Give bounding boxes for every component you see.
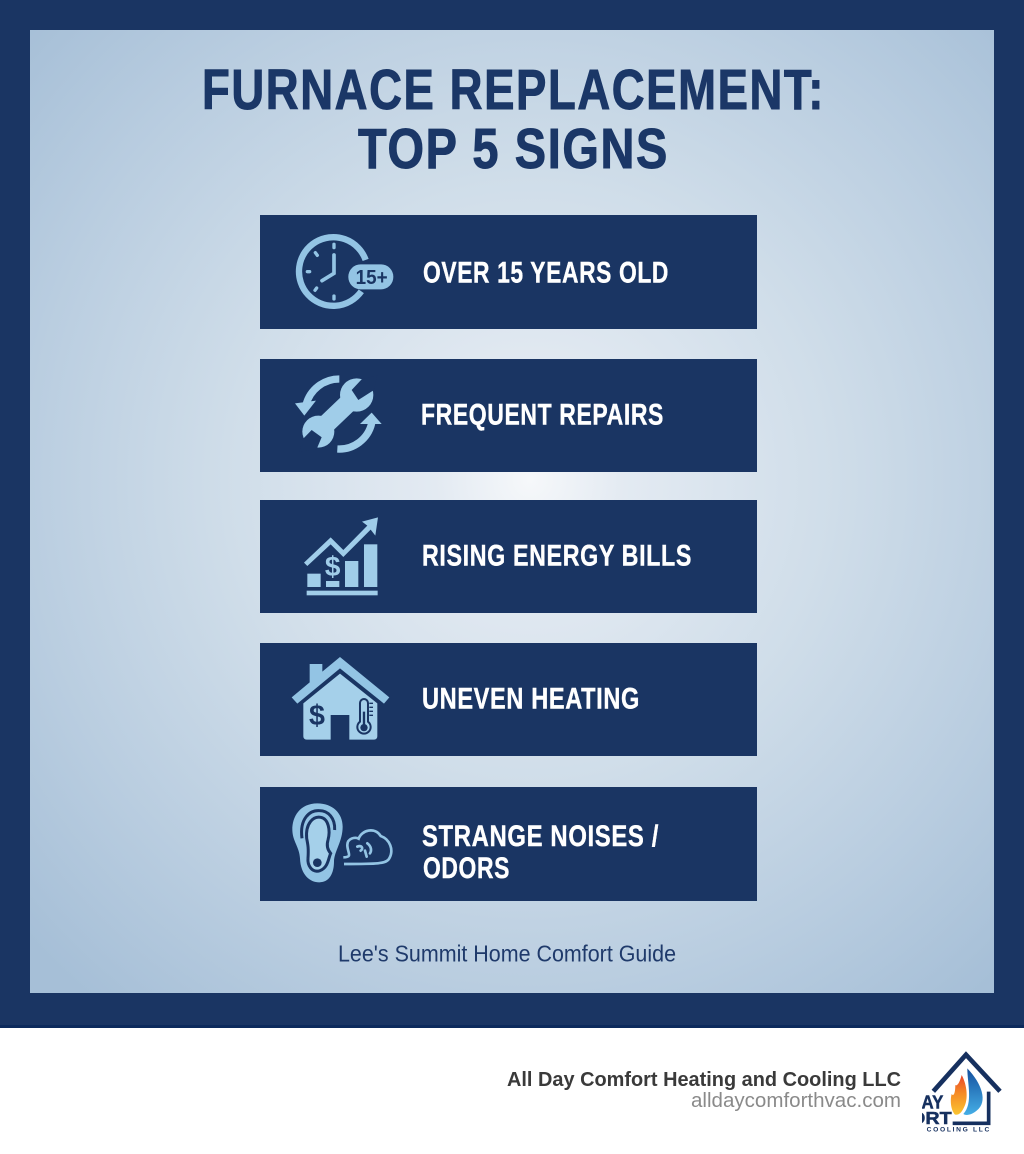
panel: frequent repairs (260, 359, 757, 472)
icon: clock with 15+ badge (299, 237, 393, 306)
panel: strange noises / odors (260, 787, 757, 901)
label: over 15 years old: OVER 15 YEARS OLD (423, 256, 669, 290)
logo: COOLING LLC (927, 1127, 990, 1134)
label: uneven heating: UNEVEN HEATING (422, 682, 640, 716)
logo: ORT (910, 1108, 952, 1128)
logo: DAY (909, 1091, 944, 1112)
icon: clock with 15+ badge: 15+ (356, 267, 388, 289)
title: TOP 5 SIGNS (358, 117, 669, 181)
logo (922, 1051, 1002, 1132)
footer band (0, 1025, 1024, 1154)
icon: wrench with cycle arrows (295, 375, 382, 452)
icon: ear and odor cloud (292, 803, 391, 882)
icon: house with dollar and thermometer: $ (309, 700, 325, 732)
subtitle: Lee's Summit Home Comfort Guide (338, 940, 676, 966)
footer company text: All Day Comfort Heating and Cooling LLC (507, 1069, 901, 1091)
panel: uneven heating (260, 643, 757, 756)
label: strange noises / odors: ODORS (423, 852, 510, 885)
light gradient panel (30, 30, 994, 993)
panel: rising energy bills (260, 500, 757, 613)
footer company text: alldaycomforthvac.com (691, 1090, 901, 1112)
icon: rising chart with dollar: $ (325, 551, 341, 582)
icon: house with dollar and thermometer (292, 657, 389, 740)
panel: over 15 years old (260, 215, 757, 329)
title: FURNACE REPLACEMENT: (202, 58, 825, 122)
footer company text (507, 1069, 901, 1112)
label: strange noises / odors: STRANGE NOISES / (422, 820, 659, 853)
label: strange noises / odors (422, 820, 659, 885)
label: frequent repairs: FREQUENT REPAIRS (421, 398, 664, 432)
icon: rising chart with dollar (304, 517, 378, 595)
label: rising energy bills: RISING ENERGY BILLS (422, 540, 692, 572)
title (202, 58, 825, 181)
